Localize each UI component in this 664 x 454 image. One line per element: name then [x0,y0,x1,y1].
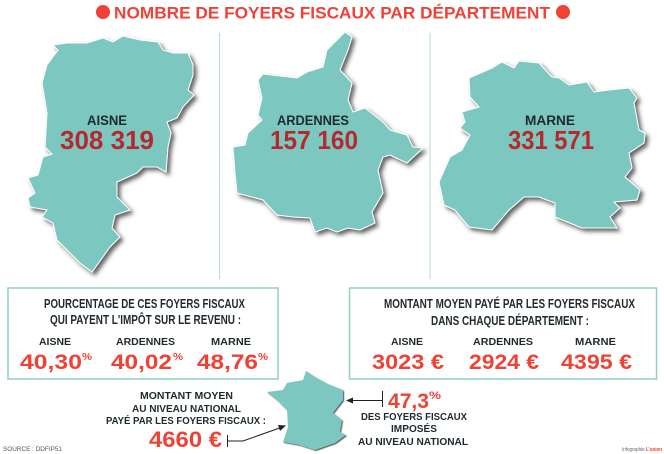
panel: percentage of taxed households: 40,02 [111,351,172,374]
panel: percentage of taxed households: 40,30 [20,351,82,374]
panel: Ardennes map: 157 160 [270,125,358,155]
panel: percentage of taxed households: QUI PAYENT L'IMPÔT SUR LE REVENU : [50,312,241,327]
national average amount: 4660 € [149,427,222,452]
national taxed percentage: AU NIVEAU NATIONAL [358,436,469,448]
national average amount: MONTANT MOYEN [140,390,233,402]
icon: map of France [267,371,346,450]
panel: Ardennes map: ARDENNES [277,113,349,128]
panel: average amount paid: 3023 € [372,351,444,374]
panel: percentage of taxed households: 48,76 [197,351,258,374]
panel: Marne map: MARNE [525,113,575,128]
panel: Ardennes map [233,32,423,232]
panel: average amount paid: DANS CHAQUE DÉPARTEMENT : [431,313,589,328]
national taxed percentage: 47,3 [388,390,429,413]
national taxed percentage: DES FOYERS FISCAUX [361,411,467,423]
panel: average amount paid: MARNE [575,336,616,348]
panel: average amount paid: 2924 € [469,351,539,374]
title: NOMBRE DE FOYERS FISCAUX PAR DÉPARTEMENT [114,4,551,22]
national average amount: AU NIVEAU NATIONAL [132,403,242,415]
arrow: national amount to France [228,425,286,447]
arrow: national percentage to France [346,391,382,407]
panel: percentage of taxed households: % [173,351,184,363]
national average amount [106,390,266,452]
panel: percentage of taxed households [8,288,278,379]
panel: percentage of taxed households: % [258,351,269,363]
panel: average amount paid [350,288,656,379]
national taxed percentage [358,390,469,448]
national average amount: PAYÉ PAR LES FOYERS FISCAUX : [106,414,266,427]
panel: percentage of taxed households: % [82,351,93,363]
panel: percentage of taxed households: ARDENNES [116,336,175,348]
panel: average amount paid: 4395 € [561,351,632,374]
panel: Aisne map: 308 319 [60,125,154,155]
national taxed percentage: IMPOSÉS [391,422,437,435]
national taxed percentage: % [429,390,441,402]
panel: percentage of taxed households: AISNE [39,336,71,348]
panel: Aisne map: AISNE [87,113,127,128]
panel: Marne map: 331 571 [508,125,594,155]
panel: percentage of taxed households: POURCENTAGE DE CES FOYERS FISCAUX [44,296,245,311]
panel: Marne map [439,61,645,230]
panel: Aisne map [28,36,194,272]
source: SOURCE : DDFIP51 [3,446,62,453]
panel: average amount paid: ARDENNES [473,336,533,348]
panel: average amount paid: AISNE [391,336,423,348]
panel: percentage of taxed households: MARNE [211,336,251,348]
